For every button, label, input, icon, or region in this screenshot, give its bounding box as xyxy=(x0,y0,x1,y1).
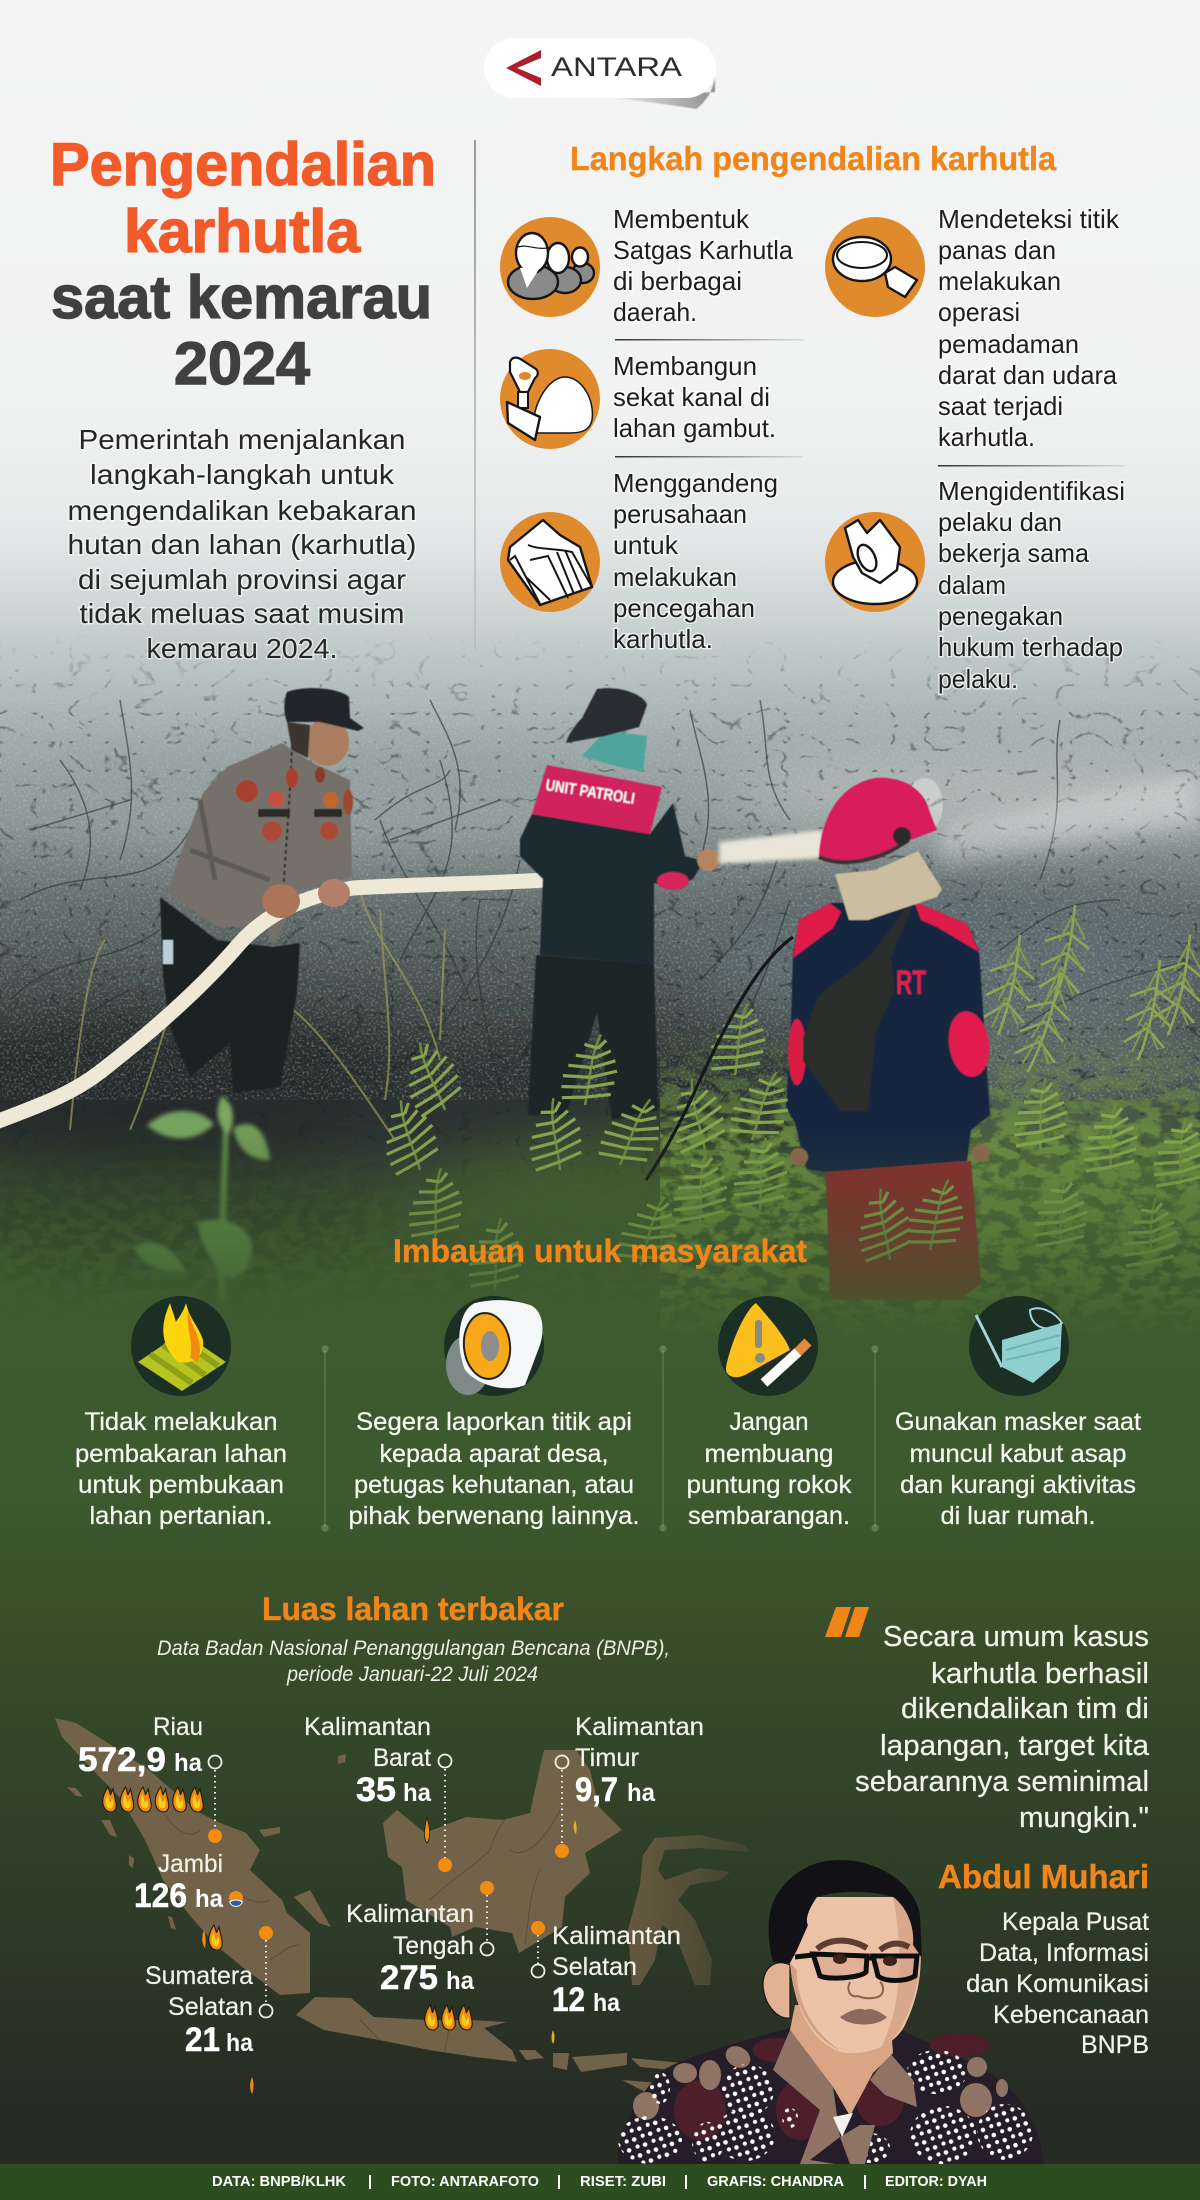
logo wordmark: ANTARA xyxy=(551,52,682,82)
data point: Kalimantan Tengah: Tengah xyxy=(393,1932,474,1960)
footer credits: DATA: BNPB/KLHK xyxy=(212,2173,346,2190)
data point: Jambi xyxy=(134,1850,243,1950)
smoke and ground tones xyxy=(0,756,1200,1280)
data point: Kalimantan Timur: 9,7 xyxy=(575,1771,618,1809)
officer hands xyxy=(262,879,350,918)
text: jangan membuang puntung: Jangan xyxy=(730,1408,808,1436)
heading: imbauan: Imbauan untuk masyarakat xyxy=(393,1233,807,1269)
text: step 1: di berbagai xyxy=(613,266,742,296)
text: step 1 xyxy=(613,204,794,327)
text: tidak melakukan pembakaran xyxy=(75,1408,287,1530)
text: step 2 xyxy=(613,351,776,443)
footer credits: FOTO: ANTARAFOTO xyxy=(391,2173,539,2190)
firefighter with pink helmet: RT xyxy=(896,964,926,1002)
text: tidak melakukan pembakaran: Tidak melakukan xyxy=(84,1408,278,1436)
neck xyxy=(790,2005,893,2116)
glasses xyxy=(795,1954,917,1980)
footer credits: | xyxy=(863,2173,867,2190)
data point: Kalimantan Selatan: Selatan xyxy=(552,1953,637,1981)
map of Indonesia xyxy=(55,1718,750,2092)
intro paragraph xyxy=(68,424,416,664)
icon: burning land xyxy=(131,1296,231,1396)
data point: Riau xyxy=(78,1713,222,1843)
text: step 5: pelaku. xyxy=(938,664,1018,694)
quote text: lapangan, target kita xyxy=(880,1730,1150,1762)
text: jangan membuang puntung: sembarangan. xyxy=(688,1502,850,1530)
intro paragraph: kemarau 2024. xyxy=(146,633,338,664)
text: gunakan masker: muncul kabut asap xyxy=(910,1440,1126,1468)
quote text: sebarannya seminimal xyxy=(855,1766,1149,1798)
subtitle: source and period: periode Januari-22 Juli 2024 xyxy=(286,1663,538,1686)
data point: Sumatera Selatan: Selatan xyxy=(168,1993,253,2021)
text: step 4: operasi xyxy=(938,297,1020,327)
data point: Riau: ha xyxy=(174,1749,203,1777)
text: step 4: Mendeteksi titik xyxy=(938,204,1120,234)
footer credits: GRAFIS: CHANDRA xyxy=(707,2173,844,2190)
intro paragraph: di sejumlah provinsi agar xyxy=(78,564,406,595)
ferns and green grass xyxy=(371,905,1200,1290)
text: segera laporkan: kepada aparat desa, xyxy=(380,1440,608,1468)
lips xyxy=(840,2009,887,2024)
ear xyxy=(763,1963,790,2018)
firefighter with nozzle xyxy=(520,688,719,1120)
title xyxy=(50,131,436,397)
text: step 1: Satgas Karhutla xyxy=(613,235,794,265)
young plant with broad leaves xyxy=(134,1096,270,1300)
subtitle: source and period: Data Badan Nasional Penanggulangan Bencana (BNPB), xyxy=(157,1637,670,1660)
data point: Sumatera Selatan: ha xyxy=(226,2029,254,2057)
footer credits xyxy=(0,2164,1200,2200)
text: step 4 xyxy=(938,204,1120,452)
data point: Jambi: Jambi xyxy=(158,1850,223,1878)
data point: Kalimantan Barat: 35 xyxy=(356,1771,396,1809)
face xyxy=(790,1897,921,2053)
text: step 5: hukum terhadap xyxy=(938,632,1123,662)
icon: face mask xyxy=(969,1296,1069,1396)
intro paragraph: langkah-langkah untuk xyxy=(90,459,395,490)
text: step 1: daerah. xyxy=(613,297,697,327)
text: step 5: dalam xyxy=(938,570,1006,600)
text: jangan membuang puntung xyxy=(686,1408,852,1530)
icon: magnifying glass xyxy=(825,217,925,317)
text: step 5: bekerja sama xyxy=(938,538,1090,568)
quote xyxy=(825,1607,1150,2059)
quote text xyxy=(855,1621,1150,1834)
dead twigs xyxy=(10,700,1190,1090)
nose xyxy=(848,1982,883,1998)
speaker role: Data, Informasi xyxy=(979,1939,1149,1967)
icon: shovel and mound xyxy=(500,349,600,449)
text: step 2: sekat kanal di xyxy=(613,382,770,412)
text: tidak melakukan pembakaran: pembakaran lahan xyxy=(75,1440,287,1468)
portrait: Abdul Muhari xyxy=(618,1860,1044,2164)
text: segera laporkan xyxy=(348,1408,640,1530)
text: step 4: saat terjadi xyxy=(938,391,1063,421)
data point: Jambi: ha xyxy=(195,1885,224,1913)
icon: no cigarette butts xyxy=(718,1296,818,1396)
quote text: Secara umum kasus xyxy=(883,1621,1149,1653)
data point: Kalimantan Barat: Barat xyxy=(373,1744,431,1772)
data point: Kalimantan Tengah: 275 xyxy=(380,1959,438,1997)
quote text: karhutla berhasil xyxy=(931,1658,1149,1690)
subtitle: source and period xyxy=(157,1637,670,1686)
data point: Kalimantan Barat: ha xyxy=(403,1779,432,1807)
data point: Kalimantan Timur: Timur xyxy=(575,1744,639,1772)
speaker role: Kepala Pusat xyxy=(1002,1908,1149,1936)
text: step 3: pencegahan xyxy=(613,593,755,623)
text: gunakan masker xyxy=(895,1408,1141,1530)
photo: firefighters spraying water on burnt peatland xyxy=(0,620,1200,1345)
text: segera laporkan: petugas kehutanan, atau xyxy=(354,1471,634,1499)
data point: Kalimantan Timur: Kalimantan xyxy=(575,1713,704,1741)
data point: Sumatera Selatan: 21 xyxy=(185,2021,220,2059)
title: 2024 xyxy=(174,330,311,397)
text: gunakan masker: Gunakan masker saat xyxy=(895,1408,1141,1436)
text: step 4: melakukan xyxy=(938,266,1061,296)
speaker name: Abdul Muhari xyxy=(938,1858,1149,1895)
data point: Kalimantan Selatan: 12 xyxy=(552,1981,585,2019)
data point: Sumatera Selatan xyxy=(145,1926,273,2094)
title: karhutla xyxy=(124,198,361,265)
footer credits: | xyxy=(557,2173,561,2190)
text: tidak melakukan pembakaran: lahan pertanian. xyxy=(90,1502,272,1530)
text: segera laporkan: Segera laporkan titik api xyxy=(356,1408,632,1436)
panel: luas lahan terbakar xyxy=(55,1591,750,2094)
text: step 4: panas dan xyxy=(938,235,1056,265)
police officer xyxy=(160,688,364,1093)
text: gunakan masker: di luar rumah. xyxy=(940,1502,1096,1530)
fire hose xyxy=(0,880,545,1122)
data point: Kalimantan Timur: ha xyxy=(627,1779,656,1807)
heading: langkah pengendalian karhutla: Langkah pengendalian karhutla xyxy=(570,140,1057,177)
data point: Kalimantan Selatan: Kalimantan xyxy=(552,1922,681,1950)
data point: Kalimantan Selatan: ha xyxy=(593,1989,621,2017)
quote mark xyxy=(825,1607,869,1637)
eyebrows xyxy=(817,1941,909,1950)
speaker role: BNPB xyxy=(1081,2031,1149,2059)
green undergrowth xyxy=(0,1030,1200,1345)
data point: Kalimantan Selatan xyxy=(531,1921,681,2044)
hair xyxy=(769,1860,922,1963)
speaker role: Kebencanaan xyxy=(993,2001,1149,2029)
text: gunakan masker: dan kurangi aktivitas xyxy=(900,1471,1136,1499)
intro paragraph: hutan dan lahan (karhutla) xyxy=(68,529,416,560)
text: step 2: lahan gambut. xyxy=(613,413,776,443)
shirt xyxy=(618,2028,1044,2164)
heading: luas lahan terbakar: Luas lahan terbakar xyxy=(262,1591,564,1627)
speaker role xyxy=(966,1908,1149,2059)
data point: Riau: 572,9 xyxy=(78,1741,166,1779)
logo: ANTARA xyxy=(484,38,716,109)
firefighter with nozzle: UNIT PATROLI xyxy=(544,777,636,808)
data point: Kalimantan Timur xyxy=(555,1713,704,1858)
footer credits: | xyxy=(684,2173,688,2190)
title: Pengendalian xyxy=(50,131,436,198)
data point: Kalimantan Barat: Kalimantan xyxy=(304,1713,431,1741)
text: step 3 xyxy=(613,468,778,654)
tangled dead twigs texture xyxy=(0,620,1200,1200)
text: step 5: pelaku dan xyxy=(938,507,1062,537)
text: step 4: darat dan udara xyxy=(938,360,1118,390)
text: step 5: Mengidentifikasi xyxy=(938,476,1125,506)
firefighter with pink helmet xyxy=(786,778,993,1300)
intro paragraph: Pemerintah menjalankan xyxy=(78,424,406,455)
text: step 3: Menggandeng xyxy=(613,468,778,498)
speaker role: dan Komunikasi xyxy=(966,1970,1149,1998)
icon: law enforcement xyxy=(825,512,925,612)
title: saat kemarau xyxy=(51,264,432,331)
text: step 5: penegakan xyxy=(938,601,1063,631)
text: step 3: karhutla. xyxy=(613,624,713,654)
intro paragraph: tidak meluas saat musim xyxy=(80,598,404,629)
fade from photo into green background xyxy=(0,1130,1200,1345)
dark hose line xyxy=(646,937,793,1180)
quote text: dikendalikan tim di xyxy=(901,1693,1149,1725)
text: step 3: melakukan xyxy=(613,562,737,592)
footer credits: EDITOR: DYAH xyxy=(885,2173,987,2190)
data point: Kalimantan Tengah: ha xyxy=(446,1967,475,1995)
intro paragraph: mengendalikan kebakaran xyxy=(68,495,416,526)
text: step 5 xyxy=(938,476,1125,694)
text: tidak melakukan pembakaran: untuk pembukaan xyxy=(78,1471,284,1499)
eyes xyxy=(833,1954,897,1966)
white undershirt xyxy=(833,2113,853,2137)
data point: Kalimantan Barat xyxy=(304,1713,452,1872)
footer credits: | xyxy=(368,2173,372,2190)
footer credits: RISET: ZUBI xyxy=(580,2173,666,2190)
data point: Sumatera Selatan: Sumatera xyxy=(145,1962,253,1990)
text: step 2: Membangun xyxy=(613,351,757,381)
data point: Kalimantan Tengah xyxy=(346,1881,494,2030)
dry grass stems xyxy=(70,890,445,1140)
text: step 3: untuk xyxy=(613,530,679,560)
data point: Riau: Riau xyxy=(153,1713,203,1741)
data point: Kalimantan Tengah: Kalimantan xyxy=(346,1900,474,1928)
logo pill xyxy=(484,38,716,98)
icon: documents stack xyxy=(500,512,600,612)
text: jangan membuang puntung: membuang xyxy=(704,1440,834,1468)
text: step 3: perusahaan xyxy=(613,499,747,529)
text: step 4: karhutla. xyxy=(938,422,1035,452)
water jet xyxy=(719,772,1200,865)
icon: loudspeaker xyxy=(444,1296,544,1396)
speckled ash ground texture xyxy=(0,640,1200,1100)
text: step 1: Membentuk xyxy=(613,204,750,234)
icon: team of people xyxy=(500,217,600,317)
data point: Jambi: 126 xyxy=(134,1877,187,1915)
text: jangan membuang puntung: puntung rokok xyxy=(686,1471,852,1499)
text: segera laporkan: pihak berwenang lainnya. xyxy=(348,1502,640,1530)
quote text: mungkin." xyxy=(1019,1802,1149,1834)
text: step 4: pemadaman xyxy=(938,329,1079,359)
logo mark xyxy=(506,50,541,86)
panel: langkah pengendalian xyxy=(500,140,1125,694)
panel: imbauan untuk masyarakat xyxy=(75,1233,1141,1530)
